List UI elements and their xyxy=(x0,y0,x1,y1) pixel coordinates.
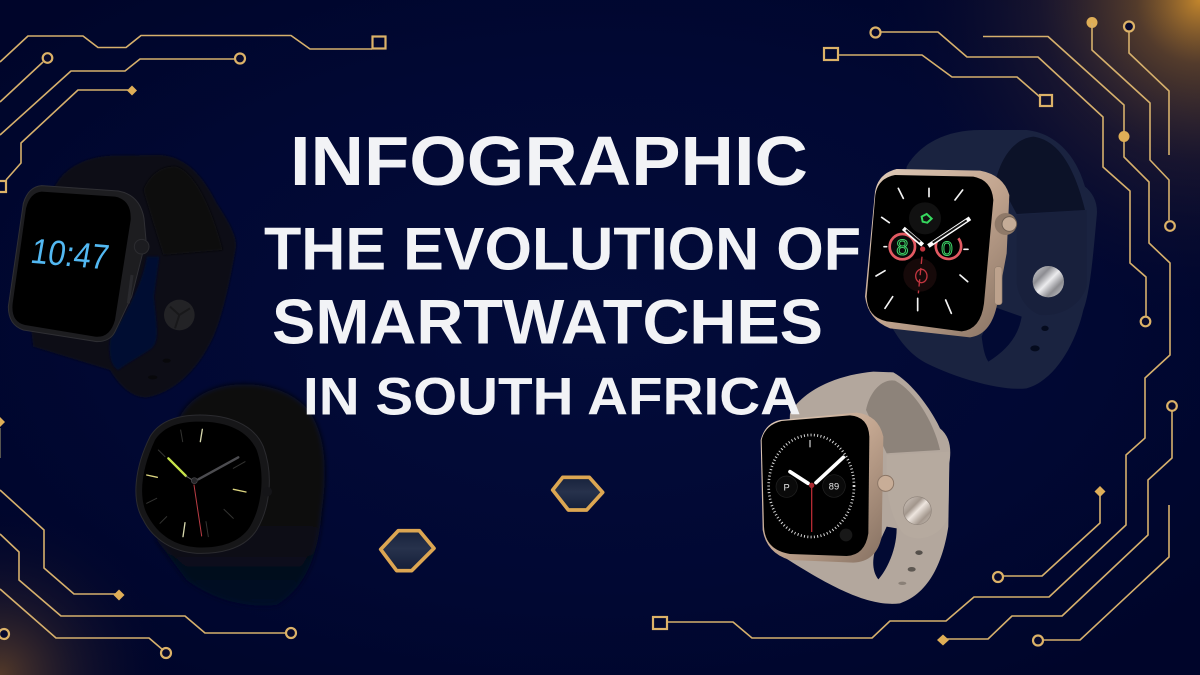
heading line: the evolution of: THE EVOLUTION OF xyxy=(264,216,861,282)
watch case and screen xyxy=(8,186,149,342)
watch face: 0 xyxy=(941,237,953,260)
rose gold case xyxy=(865,169,1017,337)
hexagon badge: right xyxy=(553,477,603,510)
watch face: 89 xyxy=(829,482,839,492)
watch: black analog xyxy=(136,384,325,606)
circuit traces: bottom left xyxy=(0,417,296,658)
heading line: smartwatches: SMARTWATCHES xyxy=(272,288,823,358)
watch: navy strap rose gold xyxy=(865,130,1097,389)
black strap xyxy=(157,384,325,606)
watch: black digital xyxy=(8,155,236,397)
digital time: 10:47 xyxy=(28,231,112,277)
heading line: in south africa: IN SOUTH AFRICA xyxy=(303,368,801,426)
watch face xyxy=(762,415,869,556)
black strap xyxy=(20,155,236,397)
circuit traces: top left xyxy=(0,36,386,192)
watch face xyxy=(867,175,993,331)
circuit traces: bottom right xyxy=(653,401,1177,646)
navy strap xyxy=(890,130,1097,389)
hexagon badge: left xyxy=(381,531,434,571)
heading: infographic: INFOGRAPHIC xyxy=(290,122,808,200)
beige strap xyxy=(783,372,950,604)
watch: beige strap rose gold xyxy=(761,372,950,604)
circuit traces: top right xyxy=(667,17,1175,638)
title xyxy=(264,122,861,426)
rose gold case xyxy=(761,413,894,563)
watch face: P xyxy=(784,482,790,492)
watch case and dial xyxy=(136,415,272,553)
watch face: 8 xyxy=(896,235,908,260)
